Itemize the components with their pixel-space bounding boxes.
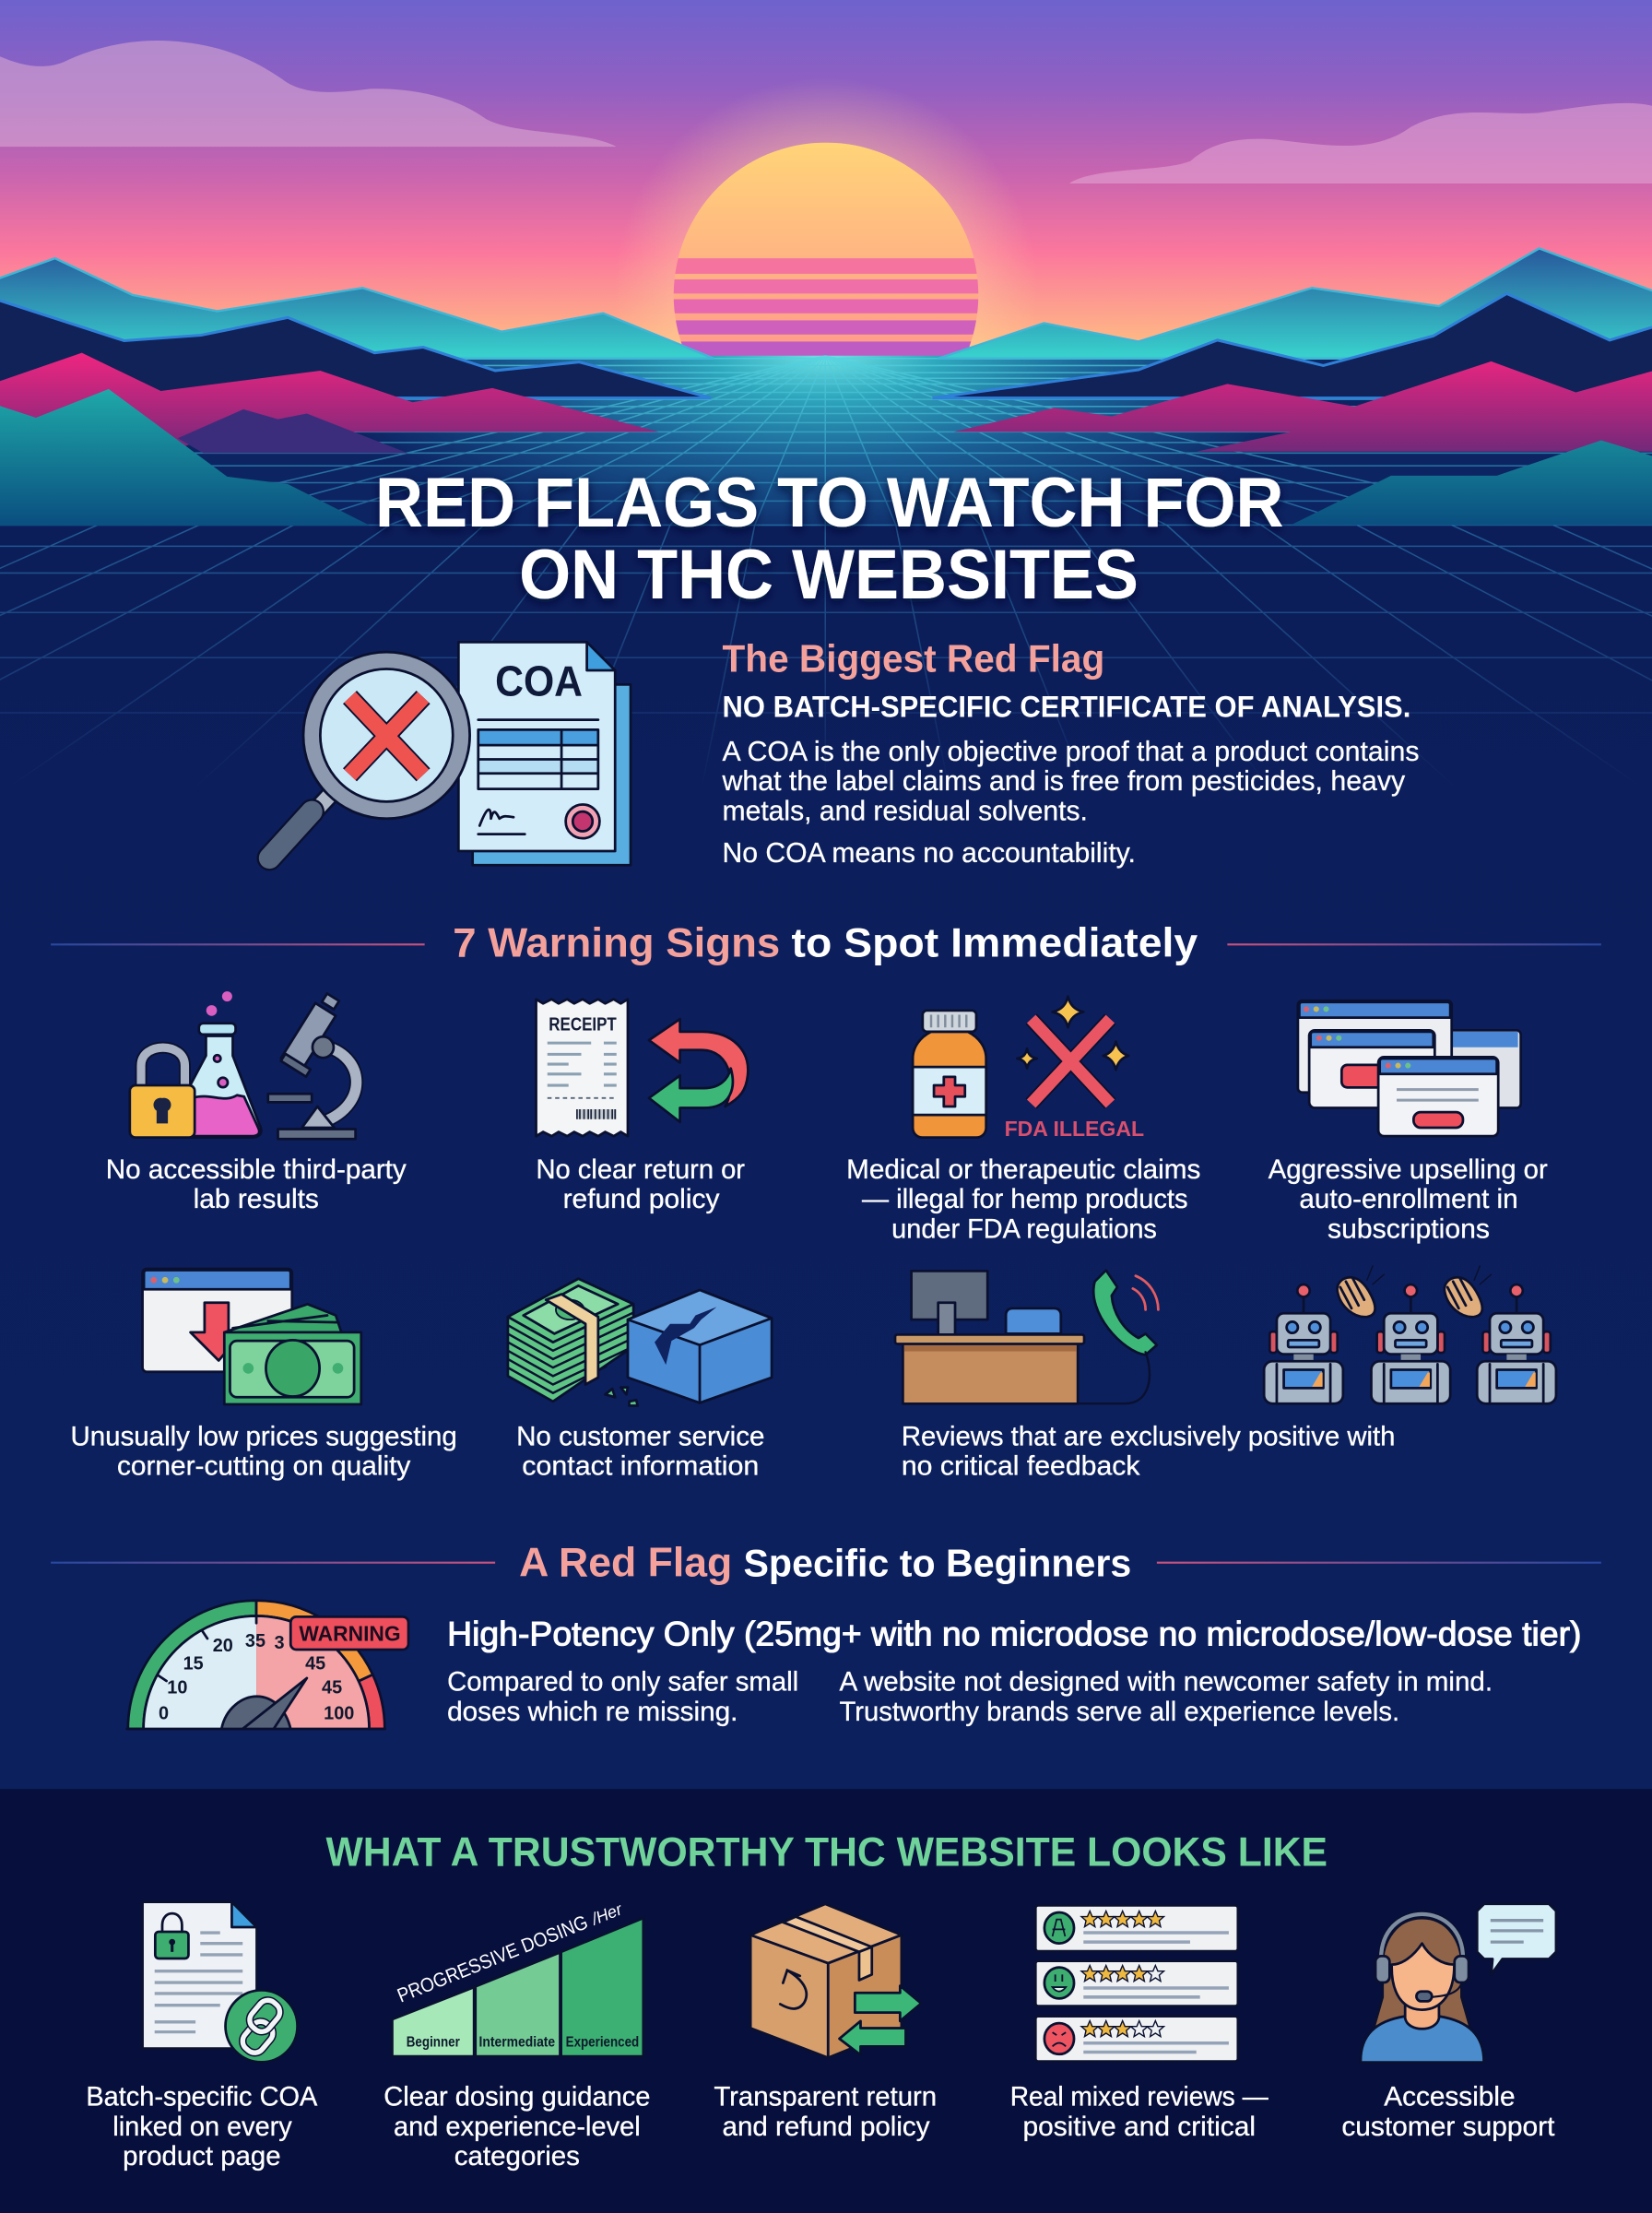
review card: four stars xyxy=(1035,1961,1238,2006)
icon: empty desk and ringing phone xyxy=(895,1271,1158,1403)
panel: warning signs grid xyxy=(71,991,1556,1481)
icon: potency gauge with warning: 45 xyxy=(322,1678,342,1698)
icon: receipt and return arrows xyxy=(537,1000,748,1136)
trust item: return policy xyxy=(714,1904,937,2142)
label: No accessible third-party xyxy=(106,1154,407,1185)
warning sign: only positive reviews xyxy=(895,1266,1556,1481)
title: ON THC WEBSITES xyxy=(519,536,1139,614)
heading: the biggest red flag: The Biggest Red Flag xyxy=(723,638,1104,680)
label xyxy=(516,1421,764,1481)
icon: document with padlock and link xyxy=(143,1902,298,2062)
title xyxy=(375,464,1284,614)
warning sign: low prices xyxy=(71,1269,457,1481)
cloud right xyxy=(1069,103,1652,183)
label: Reviews that are exclusively positive with xyxy=(902,1421,1395,1451)
text: what is missing xyxy=(447,1667,798,1727)
label: customer support xyxy=(1341,2112,1555,2142)
trust item: mixed reviews xyxy=(1010,1905,1268,2142)
icon: potency gauge with warning: 20 xyxy=(213,1636,233,1656)
trust item: dosing guidance xyxy=(384,1897,650,2172)
label: auto-enrollment in xyxy=(1299,1184,1518,1214)
icon: cash stack and damaged box xyxy=(508,1279,772,1405)
text: newcomer safety: A website not designed with newcomer safety in mind. xyxy=(840,1667,1493,1698)
label: under FDA regulations xyxy=(891,1213,1157,1244)
icon: progressive dosing staircase: PROGRESSIVE DOSING xyxy=(395,1911,591,2007)
label: Real mixed reviews — xyxy=(1010,2082,1268,2112)
pink mountains xyxy=(0,353,659,452)
icon: potency gauge with warning: 0 xyxy=(159,1703,169,1723)
label xyxy=(714,2082,937,2142)
label xyxy=(537,1154,745,1214)
label: lab results xyxy=(194,1184,319,1214)
label xyxy=(846,1154,1200,1244)
panel: high-potency warning xyxy=(127,1601,1581,1729)
label: refund policy xyxy=(563,1184,720,1214)
icon: receipt and return arrows: RECEIPT xyxy=(549,1014,617,1035)
section heading: red flag specific to beginners: A Red Flag xyxy=(519,1541,732,1586)
label: Unusually low prices suggesting xyxy=(71,1421,457,1451)
label: Batch-specific COA xyxy=(86,2082,317,2112)
icon: potency gauge with warning: 3 xyxy=(274,1633,285,1653)
warning sign: no refund policy xyxy=(537,1000,748,1214)
label: corner-cutting on quality xyxy=(117,1450,410,1481)
icon: potency gauge with warning: 10 xyxy=(167,1678,187,1698)
icon: medicine bottle and FDA illegal cross: FDA ILLEGAL xyxy=(1005,1117,1144,1141)
front teal mountain right xyxy=(1291,441,1652,525)
text: what is missing: doses which re missing. xyxy=(447,1697,738,1727)
icon: review cards xyxy=(1035,1905,1238,2062)
icon: support agent with speech bubble xyxy=(1361,1904,1556,2063)
label: — illegal for hemp products xyxy=(862,1184,1188,1214)
label: Aggressive upselling or xyxy=(1268,1154,1548,1185)
review card: three stars xyxy=(1035,2017,1238,2062)
hero illustration: synthwave sunset xyxy=(0,0,1652,790)
grid continuing below the horizon band xyxy=(0,525,1652,790)
label xyxy=(1341,2082,1555,2142)
section heading: red flag specific to beginners: Specific to Beginners xyxy=(743,1543,1131,1585)
icon: potency gauge with warning xyxy=(127,1601,408,1729)
icon: price drop window and banknotes xyxy=(143,1269,361,1404)
label xyxy=(86,2082,317,2172)
label: subscriptions xyxy=(1328,1213,1490,1244)
icon: progressive dosing staircase: Intermediate xyxy=(479,2033,555,2050)
warning sign: medical claims xyxy=(846,997,1200,1244)
body text: No COA means no accountability. xyxy=(723,837,1136,869)
body text xyxy=(722,736,1419,869)
navy mountains xyxy=(0,299,711,398)
label: No customer service xyxy=(516,1421,764,1451)
icon: parcel with return arrows xyxy=(750,1904,921,2058)
body text: what the label claims and is free from pesticides, heavy xyxy=(722,765,1406,797)
section heading: red flag specific to beginners xyxy=(51,1541,1601,1586)
warning sign: aggressive upselling xyxy=(1268,1000,1548,1244)
perspective grid near horizon xyxy=(0,356,1652,525)
neon floor xyxy=(0,356,1652,527)
back teal mountains xyxy=(0,258,714,359)
icon: progressive dosing staircase: Beginner xyxy=(407,2033,460,2050)
review card: five stars xyxy=(1035,1905,1238,1951)
icon: potency gauge with warning: 15 xyxy=(183,1654,204,1675)
subheading: no batch-specific COA: NO BATCH-SPECIFIC CERTIFICATE OF ANALYSIS. xyxy=(723,691,1410,724)
sun with stripes xyxy=(673,143,979,357)
panel: what a trustworthy website looks like xyxy=(0,1789,1652,2213)
icon: progressive dosing staircase: Experienced xyxy=(566,2033,639,2050)
cloud left xyxy=(0,41,617,147)
icon: potency gauge with warning: 100 xyxy=(324,1703,354,1723)
text: newcomer safety: Trustworthy brands serve all experience levels. xyxy=(840,1697,1399,1727)
panel: biggest red flag xyxy=(269,638,1419,869)
warning sign: no lab results xyxy=(106,991,407,1214)
label xyxy=(1268,1154,1548,1244)
section heading: 7 warning signs: to Spot Immediately xyxy=(792,921,1198,966)
body text: A COA is the only objective proof that a product contains xyxy=(723,736,1419,767)
trust item: customer support xyxy=(1341,1904,1556,2142)
label xyxy=(1010,2082,1268,2142)
icon: potency gauge with warning: 35 xyxy=(245,1631,266,1651)
label: product page xyxy=(123,2141,281,2172)
icon: COA document with magnifier: COA xyxy=(495,657,583,705)
label: positive and critical xyxy=(1022,2112,1256,2142)
sun glow xyxy=(614,77,1038,501)
icon: COA document with magnifier xyxy=(269,642,631,865)
icon: medicine bottle and FDA illegal cross xyxy=(913,997,1144,1141)
text: what is missing: Compared to only safer small xyxy=(447,1667,798,1698)
label: Transparent return xyxy=(714,2082,937,2112)
label xyxy=(71,1421,457,1481)
label: no critical feedback xyxy=(902,1450,1140,1481)
panel background xyxy=(0,1789,1652,2213)
icon: flask, padlock and microscope xyxy=(130,991,357,1139)
label: Accessible xyxy=(1384,2082,1516,2112)
label xyxy=(902,1421,1395,1481)
label xyxy=(106,1154,407,1214)
icon: stacked browser popups xyxy=(1298,1000,1521,1136)
icon: potency gauge with warning: 45 xyxy=(305,1654,325,1675)
label: and refund policy xyxy=(723,2112,930,2142)
label xyxy=(384,2082,650,2172)
label: Medical or therapeutic claims xyxy=(846,1154,1200,1185)
text: newcomer safety xyxy=(840,1667,1493,1727)
body text: metals, and residual solvents. xyxy=(723,795,1088,826)
small purple ridge xyxy=(178,409,407,453)
title: RED FLAGS TO WATCH FOR xyxy=(375,464,1284,542)
icon: progressive dosing staircase: /Her xyxy=(587,1899,625,1929)
label: and experience-level xyxy=(394,2112,641,2142)
label: categories xyxy=(454,2141,580,2172)
heading: high-potency only: High-Potency Only (25mg+ with no microdose no microdose/low-dose tier) xyxy=(447,1615,1581,1653)
section heading: 7 warning signs xyxy=(51,921,1601,966)
heading: WHAT A TRUSTWORTHY THC WEBSITE LOOKS LIKE xyxy=(326,1829,1328,1875)
sky gradient xyxy=(0,0,1652,360)
warning sign: no customer service xyxy=(508,1279,772,1481)
trust item: batch COA xyxy=(86,1902,317,2172)
label: No clear return or xyxy=(537,1154,745,1185)
icon: clapping robots xyxy=(1264,1266,1556,1403)
label: contact information xyxy=(522,1450,759,1481)
label: linked on every xyxy=(112,2112,292,2142)
section heading: 7 warning signs: 7 Warning Signs xyxy=(453,921,780,966)
icon: progressive dosing staircase xyxy=(392,1897,643,2056)
front teal mountain left xyxy=(0,389,371,526)
label: Clear dosing guidance xyxy=(384,2082,650,2112)
icon: potency gauge with warning: WARNING xyxy=(299,1621,401,1645)
